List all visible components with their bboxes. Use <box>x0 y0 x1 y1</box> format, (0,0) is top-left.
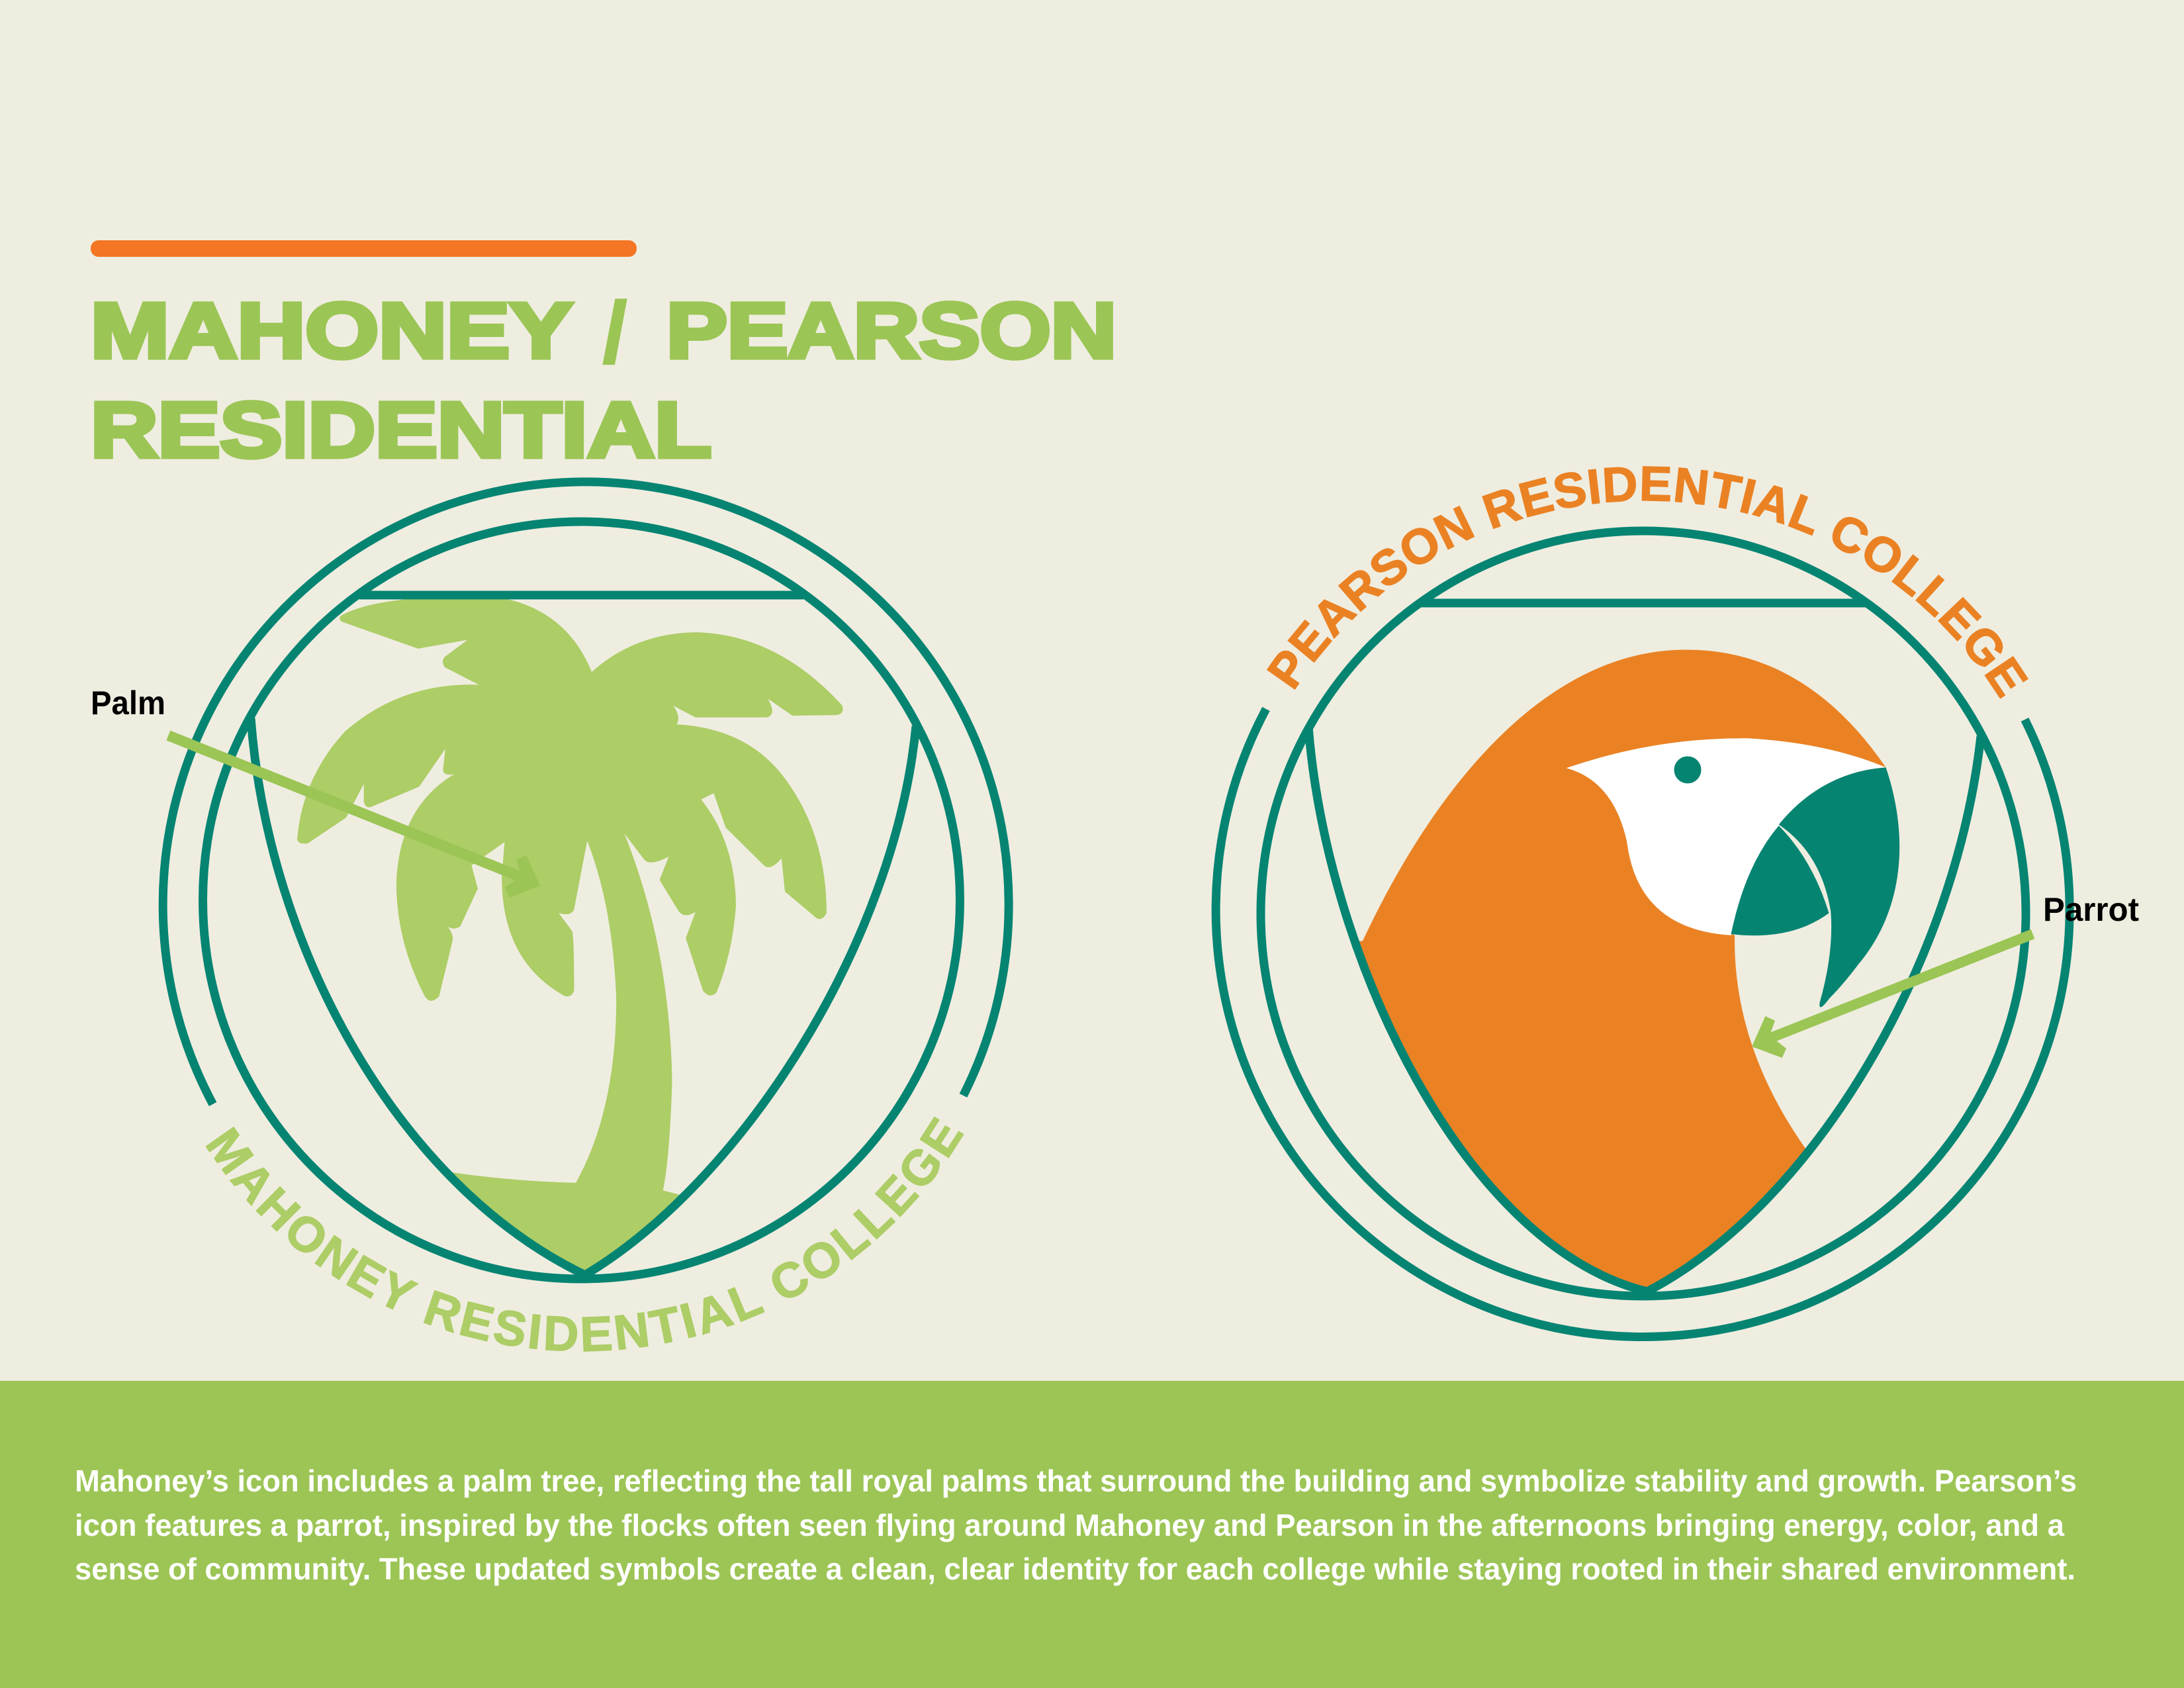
description text <box>75 1464 2077 1586</box>
title: / <box>603 284 627 381</box>
upper beak <box>1779 767 1899 1008</box>
icon: parrot <box>1314 650 1899 1302</box>
shield outline <box>1308 603 1981 1291</box>
curved label: Pearson Residential College: PEARSON RESIDENTIAL COLLEGE <box>1267 466 2028 699</box>
parrot body <box>1359 650 1886 1287</box>
title: MAHONEY <box>91 287 572 375</box>
icon: palm tree <box>297 598 843 1302</box>
arrow: palm callout <box>168 735 540 898</box>
description text: icon features a parrot, inspired by the flocks often seen flying around Mahoney and Pearson in the afternoons bringing energy, color, and a <box>75 1508 2064 1542</box>
outer ring <box>163 482 1009 1104</box>
lower beak <box>1731 825 1829 935</box>
panel: Mahoney logo <box>159 477 1013 1352</box>
outer ring <box>1216 709 2070 1337</box>
inner ring <box>1261 531 2026 1296</box>
curved label: Mahoney Residential College: MAHONEY RESIDENTIAL COLLEGE <box>205 1116 964 1352</box>
title <box>91 284 1116 474</box>
panel: Pearson logo <box>1211 466 2074 1341</box>
parrot eye <box>1674 756 1701 784</box>
inner ring <box>203 522 960 1279</box>
title: RESIDENTIAL <box>91 387 711 474</box>
parrot face <box>1567 738 1886 935</box>
shield outline <box>251 595 916 1275</box>
description text: sense of community. These updated symbols create a clean, clear identity for each college while staying rooted in their shared environment. <box>75 1552 2075 1586</box>
description text: Mahoney’s icon includes a palm tree, reflecting the tall royal palms that surround the building and symbolize stability and growth. Pearson’s <box>75 1464 2077 1498</box>
callout: Palm label: Palm <box>91 684 165 722</box>
callout: Parrot label: Parrot <box>2043 891 2139 928</box>
bottom band <box>0 1381 2184 1688</box>
arrow: parrot callout <box>1752 934 2033 1058</box>
title: PEARSON <box>666 287 1116 375</box>
orange accent bar <box>91 240 637 257</box>
